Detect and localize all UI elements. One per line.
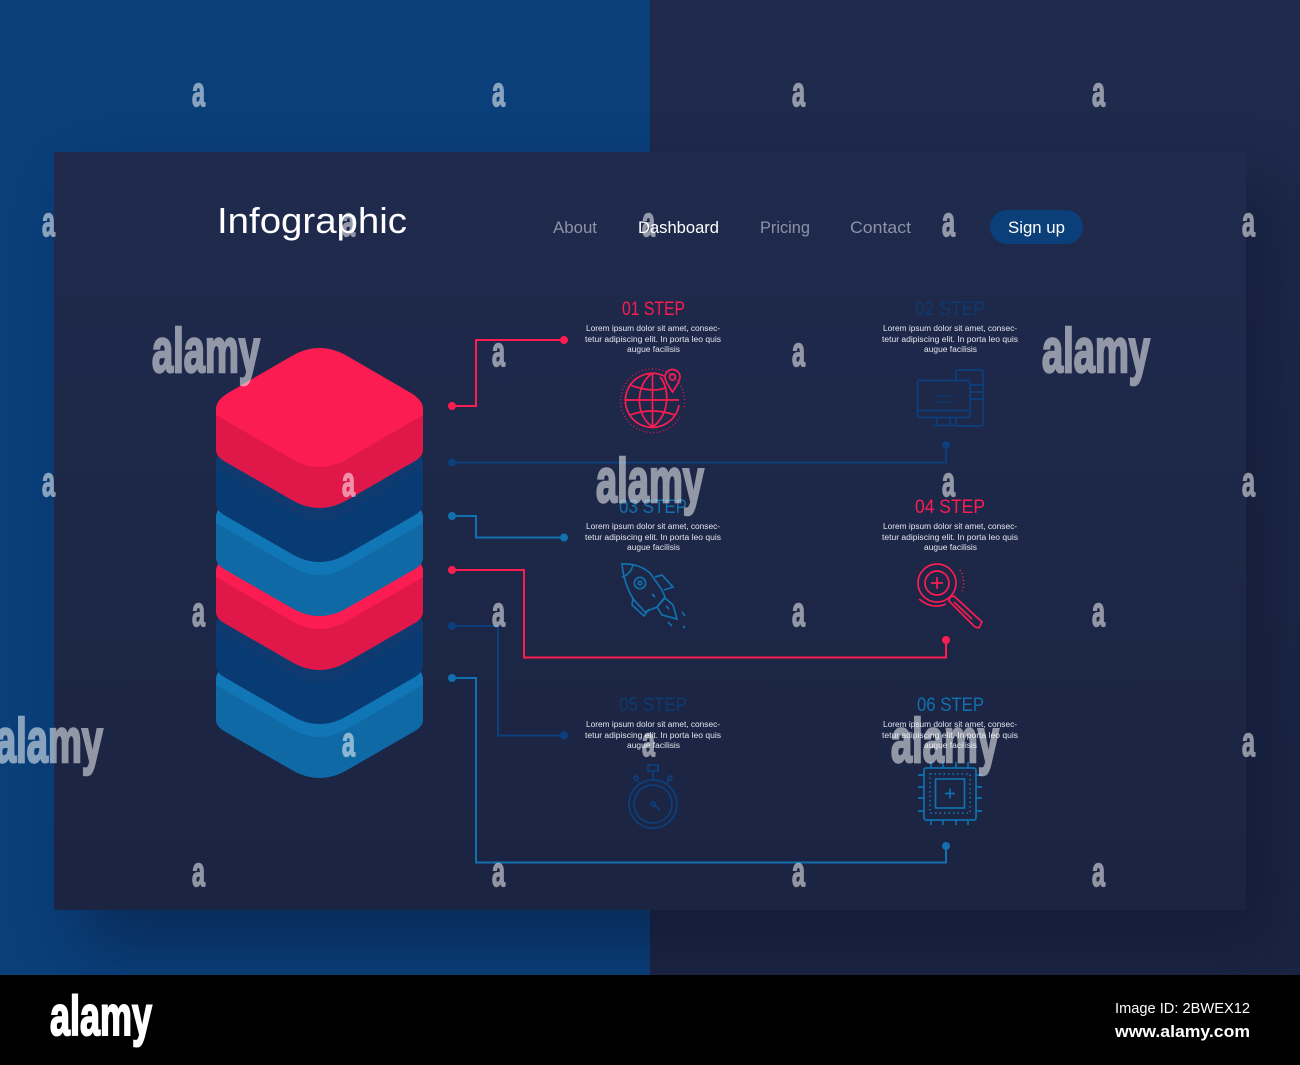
watermark overlay: alamy bbox=[596, 447, 704, 516]
nav: About: About bbox=[553, 218, 597, 237]
watermark overlay bbox=[0, 68, 1255, 895]
body text bbox=[882, 720, 1018, 750]
watermark overlay: a bbox=[342, 458, 355, 505]
isometric layer stack bbox=[216, 348, 423, 778]
button: Sign up: Sign up bbox=[1008, 218, 1065, 237]
footer logo: alamy bbox=[50, 984, 152, 1047]
body text bbox=[585, 522, 721, 552]
step 06 bbox=[882, 695, 1018, 825]
body text bbox=[882, 522, 1018, 552]
layer 6 bbox=[216, 618, 423, 778]
body text: augue facilisis bbox=[924, 741, 977, 750]
body text: augue facilisis bbox=[627, 543, 680, 552]
navigation bbox=[553, 210, 1083, 244]
watermark overlay: a bbox=[492, 68, 505, 115]
watermark overlay: a bbox=[642, 718, 655, 765]
watermark overlay: a bbox=[342, 718, 355, 765]
connector 3 bbox=[448, 512, 568, 542]
heading: 06 STEP bbox=[917, 695, 984, 716]
nav: Contact: Contact bbox=[850, 218, 911, 237]
body text: Lorem ipsum dolor sit amet, consec- bbox=[883, 522, 1017, 531]
watermark overlay: a bbox=[492, 328, 505, 375]
body text: augue facilisis bbox=[924, 543, 977, 552]
footer url: www.alamy.com bbox=[1114, 1022, 1250, 1041]
watermark overlay: a bbox=[42, 198, 55, 245]
watermark overlay: a bbox=[1242, 458, 1255, 505]
step 03 bbox=[585, 497, 721, 628]
step 05 bbox=[585, 695, 721, 828]
nav: Pricing: Pricing bbox=[760, 218, 810, 237]
watermark overlay: a bbox=[192, 588, 205, 635]
body text: tetur adipiscing elit. In porta leo quis bbox=[585, 731, 721, 740]
watermark overlay: a bbox=[192, 848, 205, 895]
body text: augue facilisis bbox=[924, 345, 977, 354]
layer 2 bbox=[216, 402, 423, 562]
body text: Lorem ipsum dolor sit amet, consec- bbox=[586, 324, 720, 333]
panel: main card bbox=[54, 152, 1246, 910]
body text: tetur adipiscing elit. In porta leo quis bbox=[585, 533, 721, 542]
body text bbox=[585, 720, 721, 750]
step 01 bbox=[585, 299, 721, 433]
body text: tetur adipiscing elit. In porta leo quis bbox=[585, 335, 721, 344]
watermark overlay: a bbox=[1242, 718, 1255, 765]
body text: Lorem ipsum dolor sit amet, consec- bbox=[883, 720, 1017, 729]
step 04 bbox=[882, 497, 1018, 628]
connector 2 bbox=[448, 441, 950, 466]
watermark overlay: a bbox=[1092, 68, 1105, 115]
connector 6 bbox=[448, 674, 950, 862]
icon: chip bbox=[918, 762, 982, 825]
nav: Dashboard: Dashboard bbox=[638, 218, 719, 237]
watermark overlay: alamy bbox=[0, 707, 103, 776]
heading: 01 STEP bbox=[622, 299, 685, 320]
watermark overlay: a bbox=[792, 328, 805, 375]
body text: Lorem ipsum dolor sit amet, consec- bbox=[586, 522, 720, 531]
watermark overlay: a bbox=[1092, 588, 1105, 635]
watermark overlay: a bbox=[492, 848, 505, 895]
body text bbox=[882, 324, 1018, 354]
icon: rocket bbox=[622, 564, 685, 628]
body text: tetur adipiscing elit. In porta leo quis bbox=[882, 335, 1018, 344]
button: Sign up bbox=[990, 210, 1083, 244]
heading: 02 STEP bbox=[915, 299, 985, 320]
heading: 05 STEP bbox=[619, 695, 687, 716]
body text: Lorem ipsum dolor sit amet, consec- bbox=[586, 720, 720, 729]
body text bbox=[585, 324, 721, 354]
heading: 04 STEP bbox=[915, 497, 985, 518]
watermark overlay: alamy bbox=[152, 317, 260, 386]
step 02 bbox=[882, 299, 1018, 426]
watermark overlay: alamy bbox=[891, 707, 999, 776]
connector 5 bbox=[448, 622, 568, 740]
watermark overlay: a bbox=[42, 458, 55, 505]
body text: Lorem ipsum dolor sit amet, consec- bbox=[883, 324, 1017, 333]
watermark overlay: a bbox=[792, 848, 805, 895]
watermark overlay: a bbox=[792, 588, 805, 635]
icon: computer bbox=[918, 370, 983, 426]
watermark overlay: a bbox=[1242, 198, 1255, 245]
footer bar bbox=[0, 975, 1300, 1065]
layer 4 bbox=[216, 510, 423, 670]
icon: globe with pin bbox=[621, 369, 685, 433]
heading: 03 STEP bbox=[619, 497, 687, 518]
watermark overlay: a bbox=[642, 198, 655, 245]
watermark overlay: a bbox=[192, 68, 205, 115]
footer image id: Image ID: 2BWEX12 bbox=[1115, 1000, 1250, 1017]
body text: tetur adipiscing elit. In porta leo quis bbox=[882, 533, 1018, 542]
background: right navy block bbox=[650, 0, 1300, 975]
layer 3 bbox=[216, 456, 423, 616]
icon: magnifier bbox=[918, 564, 982, 628]
connector 4 bbox=[448, 566, 950, 658]
watermark overlay: a bbox=[342, 198, 355, 245]
watermark overlay: alamy bbox=[1042, 317, 1150, 386]
connector 1 bbox=[448, 336, 568, 410]
icon: stopwatch bbox=[629, 765, 677, 828]
background: left blue block bbox=[0, 0, 650, 975]
panel shadow bbox=[54, 152, 1246, 910]
body text: augue facilisis bbox=[627, 741, 680, 750]
layer 1 bbox=[216, 348, 423, 508]
body text: augue facilisis bbox=[627, 345, 680, 354]
body text: tetur adipiscing elit. In porta leo quis bbox=[882, 731, 1018, 740]
title: Infographic bbox=[217, 200, 407, 241]
watermark overlay: a bbox=[492, 588, 505, 635]
watermark overlay: a bbox=[942, 458, 955, 505]
watermark overlay: a bbox=[792, 68, 805, 115]
layer 5 bbox=[216, 564, 423, 724]
watermark overlay: a bbox=[942, 198, 955, 245]
watermark overlay: a bbox=[1092, 848, 1105, 895]
